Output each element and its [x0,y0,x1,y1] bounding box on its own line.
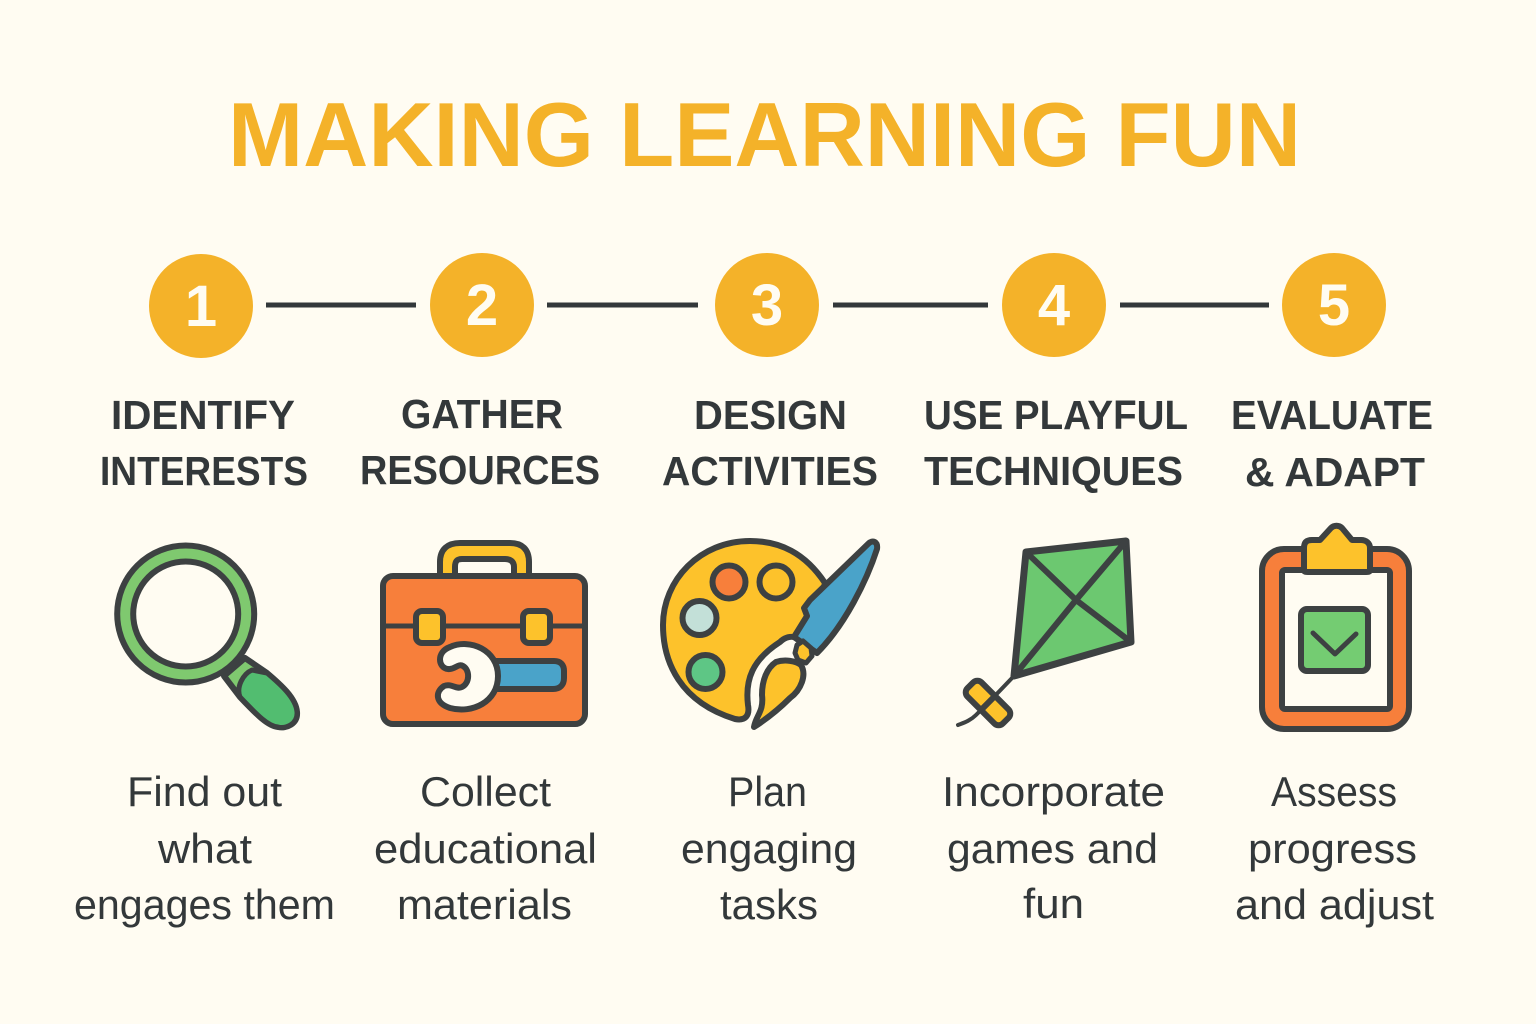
number badge 1: 1 [185,274,217,339]
description: plan engaging tasks: Plan [728,768,807,815]
paint wells [712,566,746,598]
description: find out what engages them: Find out [127,768,282,815]
description: assess progress and adjust [1235,768,1434,928]
kite bow [963,678,1013,728]
icon: palette and brush [663,541,877,727]
clipboard paper [1282,570,1390,709]
brush bristles [754,661,803,727]
description: collect educational materials: educational [374,825,597,872]
number badge 2: 2 [466,273,498,338]
heading: gather resources: RESOURCES [360,447,600,493]
connector: step 3 to 4 [833,302,988,308]
icon: magnifying glass [117,546,297,727]
connector: step 2 to 3 [547,302,698,308]
description: incorporate games and fun: games and [947,825,1158,872]
description: find out what engages them [74,768,335,928]
heading: identify interests [100,392,308,494]
clipboard clip [1304,526,1370,572]
description: assess progress and adjust: progress [1248,825,1417,872]
icon: clipboard [1262,526,1409,729]
check mark [1313,633,1356,654]
wrench head [438,644,498,710]
description: assess progress and adjust: and adjust [1235,881,1434,928]
kite sail [1014,541,1131,676]
number badge 4: 4 [1038,273,1070,338]
kite tail [958,677,1013,725]
heading: gather resources: GATHER [401,391,563,437]
description: collect educational materials [374,768,597,928]
clipboard board [1262,549,1409,729]
handle grip [239,670,297,727]
description: find out what engages them: engages them [74,881,335,928]
heading: use playful techniques [924,392,1188,494]
heading: design activities: DESIGN [694,392,847,438]
icon: toolbox [383,543,585,724]
heading: evaluate and adapt [1231,392,1433,495]
description: collect educational materials: materials [397,881,572,928]
description: plan engaging tasks: engaging [681,825,857,872]
description: incorporate games and fun: fun [1023,880,1084,927]
description: plan engaging tasks [681,768,857,928]
step 1 [74,254,335,928]
heading: design activities [662,392,878,494]
lens [133,562,238,666]
icon: kite [958,541,1131,728]
palette [663,541,825,719]
heading: evaluate and adapt: EVALUATE [1231,392,1433,438]
number badge 1 [149,254,253,358]
description: collect educational materials: Collect [420,768,551,815]
description: assess progress and adjust: Assess [1271,768,1397,815]
brush blade [794,542,877,653]
number badge 5 [1282,253,1386,357]
number badge 3 [715,253,819,357]
heading: identify interests: INTERESTS [100,448,308,494]
left latch [416,611,443,643]
heading: use playful techniques: USE PLAYFUL [924,392,1188,438]
step 3 [662,253,878,928]
number badge 4 [1002,253,1106,357]
toolbox body [383,576,585,724]
description: incorporate games and fun: Incorporate [942,768,1165,815]
number badge 2 [430,253,534,357]
heading: evaluate and adapt: & ADAPT [1245,449,1425,495]
heading: identify interests: IDENTIFY [111,392,295,438]
heading: use playful techniques: TECHNIQUES [924,448,1183,494]
toolbox handle [440,543,529,576]
title: MAKING LEARNING FUN [228,85,1301,186]
heading: design activities: ACTIVITIES [662,448,878,494]
step 5 [1231,253,1434,928]
check box [1301,609,1368,671]
description: incorporate games and fun [942,768,1165,927]
connector: step 1 to 2 [266,302,416,308]
wrench handle [490,661,564,689]
connector: step 4 to 5 [1120,302,1269,308]
right latch [523,611,550,643]
number badge 3: 3 [751,273,783,338]
step 2 [360,253,600,928]
lens ring [117,546,254,682]
brush ferrule [795,641,812,663]
step 4 [924,253,1188,927]
heading: gather resources [360,391,600,493]
description: plan engaging tasks: tasks [720,881,818,928]
handle collar [224,658,297,727]
description: find out what engages them: what [157,825,252,872]
number badge 5: 5 [1318,273,1350,338]
